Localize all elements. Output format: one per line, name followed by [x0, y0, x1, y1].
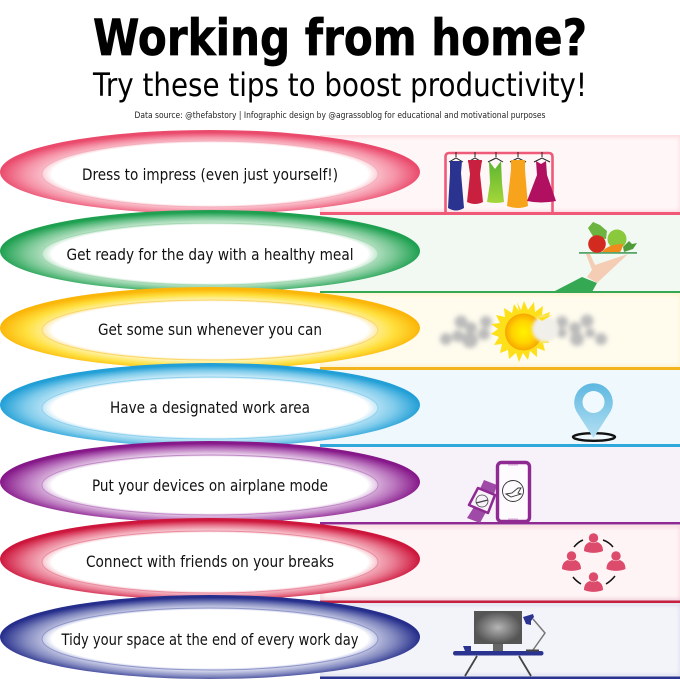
tip 6: connect with friends	[0, 518, 420, 600]
icon: smartwatch and phone in airplane mode	[467, 462, 530, 523]
icon: desk with monitor and lamp	[453, 612, 545, 676]
tip 7: tidy space: Tidy your space at the end of every work day	[61, 630, 358, 649]
icon: sun with clouds	[440, 301, 607, 362]
tip 3: get some sun: Get some sun whenever you can	[98, 320, 322, 339]
data source credit: Data source: @thefabstory | Infographic design by @agrassoblog for educational and motivational purposes	[134, 111, 546, 121]
tip 7: tidy space	[0, 595, 420, 679]
band: friends tip background	[320, 525, 680, 604]
band: meal tip background	[320, 215, 680, 294]
icon: hand holding vegetable tray	[553, 222, 637, 292]
band: dress tip background	[320, 135, 680, 215]
tip 2: healthy meal	[0, 210, 420, 292]
icon: location pin	[573, 383, 615, 441]
band: work area tip background	[320, 370, 680, 447]
tip 1: dress to impress	[0, 130, 420, 214]
tip 4: designated work area	[0, 363, 420, 447]
title: Working from home?	[93, 9, 587, 67]
band: tidy tip background	[320, 603, 680, 679]
band: airplane mode tip background	[320, 447, 680, 524]
band: sun tip background	[320, 293, 680, 370]
tip 1: dress to impress: Dress to impress (even just yourself!)	[82, 165, 338, 184]
tip 3: get some sun	[0, 287, 420, 369]
subtitle: Try these tips to boost productivity!	[92, 66, 587, 104]
icon: clothes rack with dresses	[446, 152, 556, 213]
tip 2: healthy meal: Get ready for the day with a healthy meal	[66, 245, 354, 264]
tip 4: designated work area: Have a designated work area	[110, 398, 310, 417]
tip 5: airplane mode	[0, 441, 420, 523]
tip 5: airplane mode: Put your devices on airplane mode	[92, 476, 328, 495]
tip 6: connect with friends: Connect with friends on your breaks	[86, 552, 334, 571]
icon: circle of friends	[562, 533, 626, 592]
